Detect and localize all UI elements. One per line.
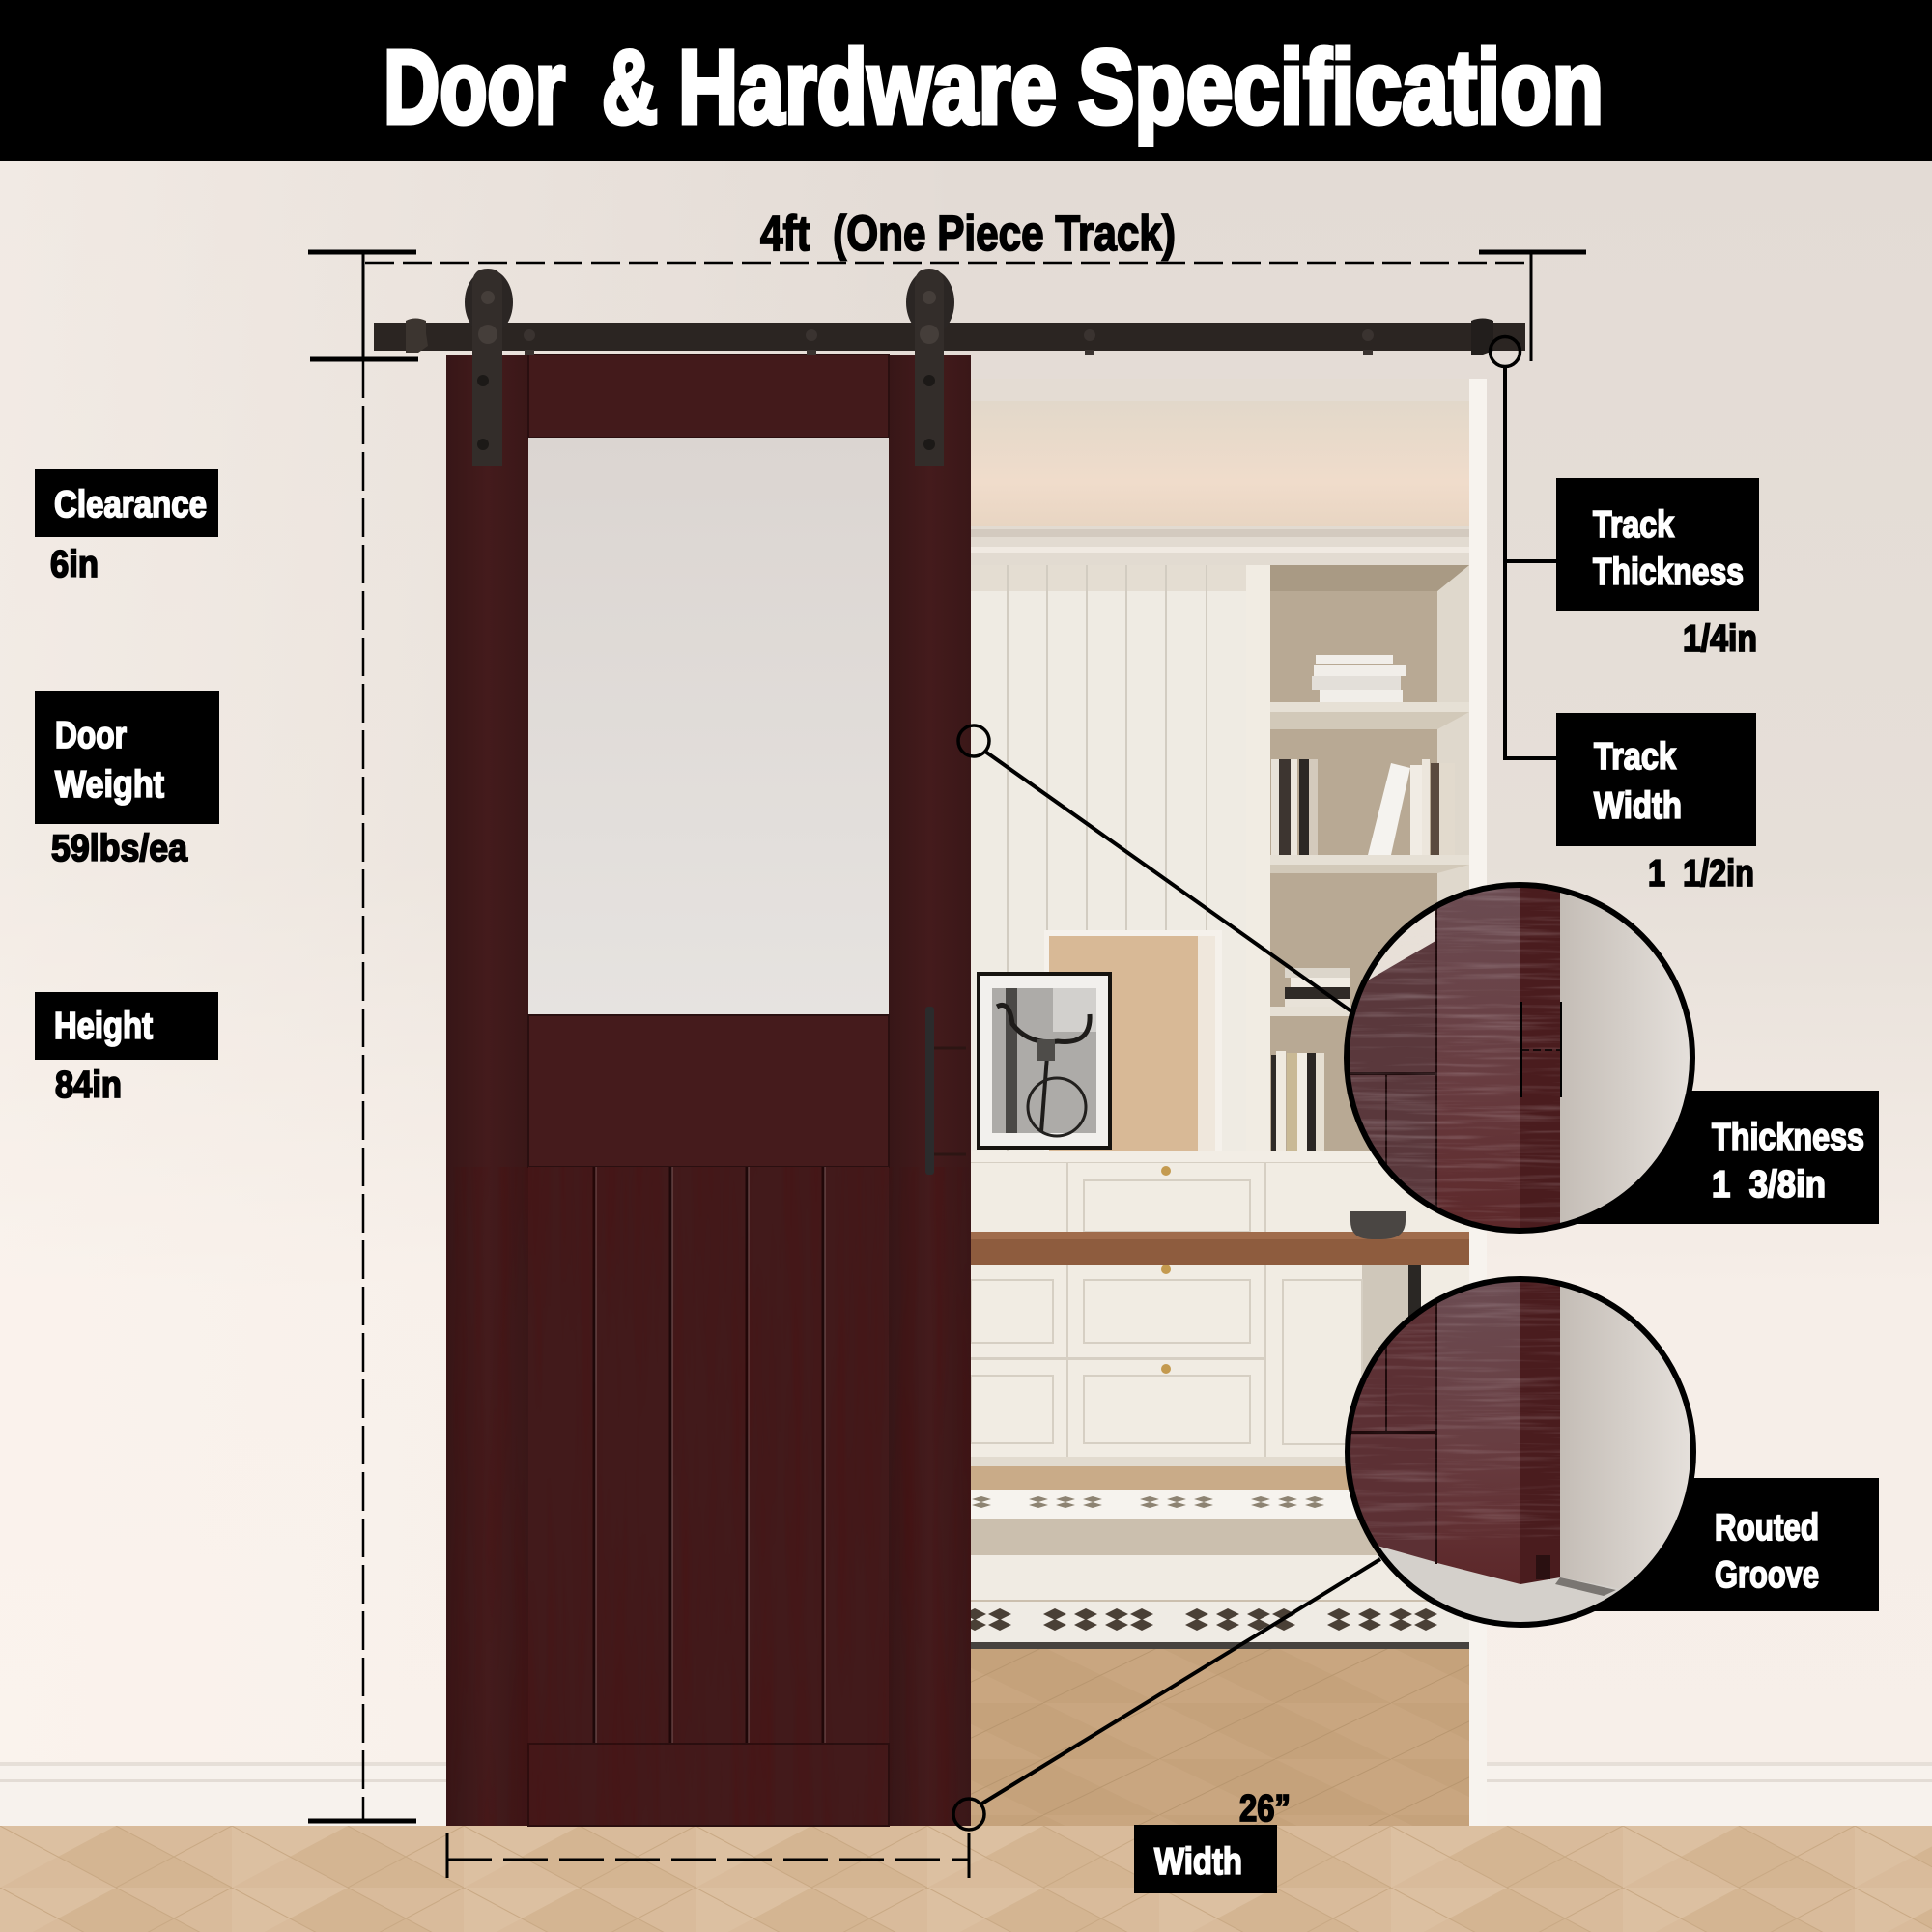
left stile [446, 355, 528, 1826]
label: track width: 1 1/2in [1648, 853, 1754, 895]
top rail [528, 355, 889, 438]
label: track thickness: 1/4in [1683, 618, 1757, 660]
right stile [889, 355, 971, 1826]
face of stile [1437, 1279, 1520, 1584]
books: middle shelf [1271, 759, 1455, 855]
label: height [35, 992, 218, 1106]
sliding track [374, 319, 1525, 355]
baseboards [0, 1762, 1932, 1826]
label: thickness [1546, 1091, 1879, 1224]
label: door weight [35, 691, 219, 869]
right hanger [906, 269, 954, 466]
label: width [1134, 1788, 1291, 1893]
label: track thickness [1556, 478, 1759, 660]
doorway interior scene [971, 379, 1487, 1826]
label: track width: Track [1594, 736, 1676, 778]
label: clearance: 6in [50, 544, 99, 585]
ceiling glow [971, 401, 1469, 526]
plank section [528, 1167, 889, 1744]
panelled wall [971, 565, 1246, 1151]
artwork: bicycle photo [977, 972, 1112, 1150]
label: thickness: Thickness [1712, 1117, 1864, 1158]
title: Hardware [678, 28, 1057, 145]
wood grain overlay [446, 1167, 971, 1826]
label: clearance: Clearance [54, 484, 207, 526]
label: routed groove: Routed [1715, 1507, 1819, 1548]
door edge with groove [1520, 1279, 1560, 1584]
barn door [446, 355, 971, 1826]
right stopper [1471, 319, 1493, 355]
label: door weight: Weight [55, 764, 164, 806]
label: track width: Width [1594, 785, 1682, 827]
left hanger [465, 269, 513, 466]
magnified detail: door thickness [1343, 885, 1695, 1239]
label: track width [1556, 713, 1756, 895]
room floor [971, 1466, 1469, 1490]
door jamb [1469, 379, 1487, 1826]
magnified detail: routed groove [1343, 1279, 1700, 1633]
label: door weight: Door [55, 715, 127, 756]
title: Specification [1078, 28, 1604, 145]
height and clearance dimension [308, 252, 418, 1821]
artwork: watercolor canvas [1044, 930, 1222, 1151]
label: track thickness: Track [1593, 504, 1674, 546]
left stopper [406, 319, 428, 353]
herringbone room floor [971, 1649, 1469, 1826]
soffit [971, 379, 1469, 401]
track length label: 4ft (One Piece Track) [760, 206, 1176, 261]
title [384, 28, 1604, 145]
label: routed groove [1546, 1478, 1879, 1611]
title bar [0, 0, 1932, 161]
label: routed groove: Groove [1715, 1554, 1819, 1596]
label: height: 84in [55, 1065, 122, 1106]
books: top shelf stack [1312, 655, 1406, 702]
door edge [1520, 885, 1560, 1233]
door handle [925, 1007, 966, 1175]
width dimension [447, 1833, 969, 1878]
title: Door [384, 28, 565, 145]
label: clearance [35, 469, 218, 585]
cabinets [971, 1151, 1469, 1466]
callout line to groove detail [953, 1559, 1380, 1830]
track bolts [524, 329, 1374, 355]
bookshelf [1246, 565, 1469, 1151]
face of stile [1437, 885, 1520, 1233]
title: & [602, 28, 658, 145]
track callout connector [1490, 336, 1556, 758]
desk top [971, 1232, 1469, 1323]
mid rail [528, 1015, 889, 1167]
books: lower shelf [1271, 968, 1350, 1151]
thickness ticks [1521, 1002, 1561, 1097]
label: width: 26” [1239, 1788, 1291, 1830]
bowl on desk [1350, 1211, 1406, 1239]
side panels [1350, 941, 1435, 1206]
frosted glass [528, 438, 889, 1015]
crown moulding [971, 526, 1469, 565]
rug [971, 1490, 1469, 1649]
label: track thickness: Thickness [1593, 552, 1744, 593]
label: height: Height [54, 1006, 153, 1047]
callout line to thickness detail [958, 725, 1351, 1011]
label: door weight: 59lbs/ea [51, 828, 187, 869]
label: thickness: 1 3/8in [1712, 1164, 1826, 1206]
floor [0, 1826, 1932, 1932]
bottom rail [528, 1744, 889, 1826]
label: width: Width [1154, 1841, 1242, 1883]
side panels [1350, 1304, 1435, 1562]
